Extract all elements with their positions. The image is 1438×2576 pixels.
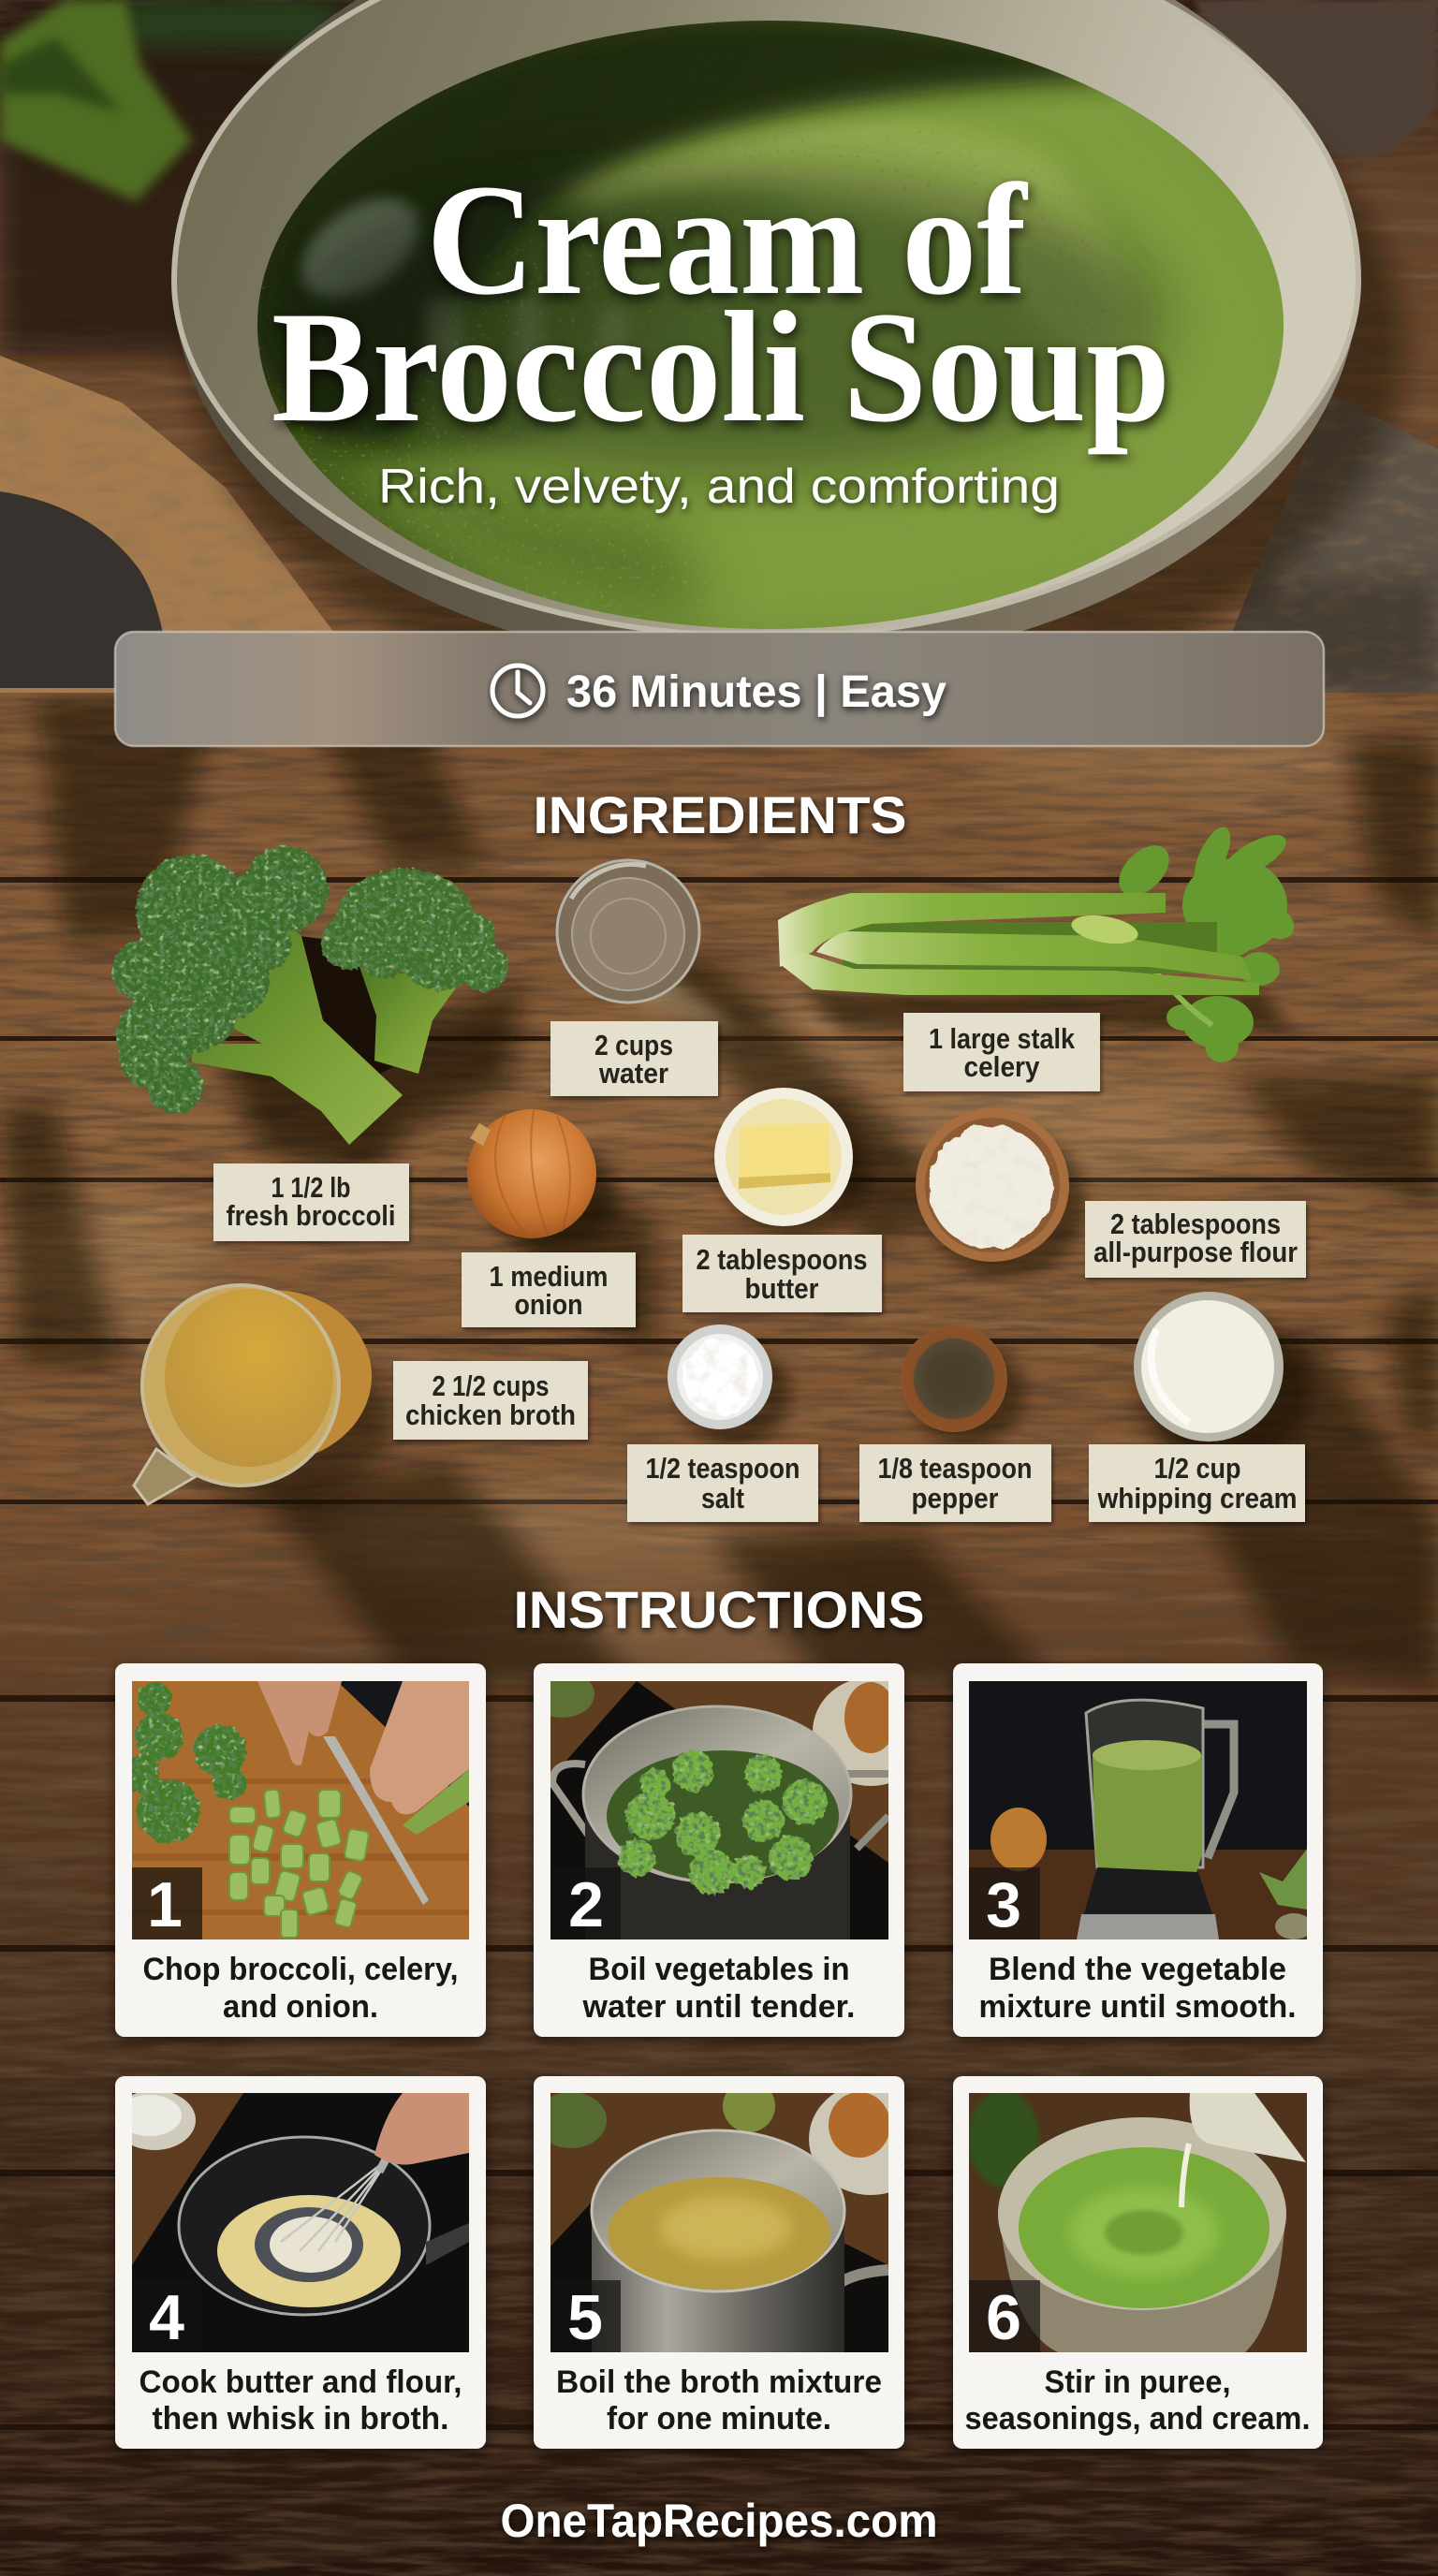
- step card 6: [953, 2076, 1323, 2449]
- central pale swirl: [552, 120, 1132, 374]
- main crown: [112, 846, 329, 1114]
- step card 4: [113, 2076, 486, 2449]
- celery stalk: [403, 1769, 469, 1835]
- label: pepper: 1/8 teaspoon: [878, 1452, 1032, 1485]
- bottom stalk: [780, 952, 1259, 995]
- caption 4: [139, 2364, 462, 2437]
- herbs: [968, 2090, 1039, 2188]
- caption 4: then whisk in broth.: [152, 2401, 449, 2437]
- number badge 2: 2: [568, 1869, 604, 1940]
- photo: boiling broth: [536, 2080, 932, 2352]
- photo: boiling vegetables: [529, 1671, 929, 1939]
- photo: finished soup with cream: [968, 2090, 1307, 2352]
- roux: [217, 2195, 401, 2307]
- celery leaves: [1109, 822, 1300, 1062]
- label: butter: butter: [745, 1272, 818, 1305]
- label: pepper: [859, 1444, 1051, 1522]
- number badge 3: [969, 1867, 1040, 1940]
- ingredient: flour: [916, 1108, 1086, 1278]
- broth liquid: [165, 1289, 333, 1467]
- label: butter: [682, 1235, 882, 1312]
- photo: chopping vegetables: [122, 1681, 469, 1939]
- photo: making roux: [113, 2090, 469, 2352]
- caption 6: [964, 2364, 1311, 2437]
- label: water: [550, 1021, 718, 1096]
- label: water: water: [598, 1057, 668, 1090]
- caption 5: Boil the broth mixture: [556, 2364, 882, 2400]
- pitcher: [1190, 2093, 1306, 2162]
- pot handles: [552, 1764, 594, 1844]
- caption 6: seasonings, and cream.: [964, 2401, 1311, 2437]
- label: broccoli: [213, 1164, 409, 1241]
- cream stream: [1181, 2144, 1189, 2207]
- step card 3: [953, 1663, 1323, 2037]
- label: water: 2 cups: [594, 1029, 673, 1061]
- caption 2: [581, 1952, 856, 2025]
- icon: clock: [492, 666, 543, 716]
- label: whipping cream: 1/2 cup: [1153, 1452, 1241, 1485]
- broccoli shadow: [215, 983, 524, 1179]
- label: whipping cream: [1089, 1444, 1305, 1522]
- caption 4: Cook butter and flour,: [139, 2364, 462, 2400]
- number badge 6: 6: [986, 2282, 1021, 2353]
- label: chicken broth: chicken broth: [405, 1398, 576, 1431]
- top stalk: [778, 893, 1166, 967]
- heading: instructions: INSTRUCTIONS: [513, 1580, 925, 1639]
- caption 2: Boil vegetables in: [588, 1952, 850, 1987]
- label: celery: celery: [964, 1050, 1040, 1083]
- step card 5: [534, 2076, 932, 2449]
- dark metal spoon: [0, 491, 170, 688]
- foam highlight: [285, 178, 436, 318]
- label: celery: [903, 1013, 1100, 1091]
- ingredient: onion: [467, 1109, 618, 1250]
- ingredient: celery: [778, 822, 1300, 1062]
- caption 2: water until tender.: [581, 1989, 856, 2025]
- caption 5: for one minute.: [607, 2401, 831, 2437]
- top-left blurred background: dark wood and broccoli stem: [0, 0, 487, 356]
- ingredient: pepper: [901, 1325, 1025, 1446]
- broccoli florets: [122, 1682, 246, 1843]
- number badge 2: [550, 1867, 621, 1940]
- green liquid: [1093, 1743, 1202, 1884]
- label: flour: [1085, 1201, 1306, 1278]
- amber side of cup: [171, 1290, 372, 1462]
- title: [271, 152, 1170, 455]
- photo: blender: [969, 1681, 1313, 1939]
- blender jar: [1086, 1700, 1203, 1867]
- whisk: [281, 2159, 389, 2251]
- knife: [323, 1736, 429, 1905]
- water: [607, 1750, 839, 1881]
- number badge 1: 1: [147, 1869, 183, 1940]
- time and difficulty bar: [115, 632, 1324, 746]
- broth surface: [608, 2177, 830, 2290]
- caption 1: Chop broccoli, celery,: [142, 1952, 459, 1987]
- scrim behind title: [281, 164, 1161, 473]
- hands: [257, 1681, 342, 1765]
- greens right: [1259, 1849, 1307, 1910]
- blender handle: [1203, 1724, 1234, 1858]
- title: Broccoli Soup: [271, 279, 1170, 455]
- label: butter: 2 tablespoons: [697, 1243, 867, 1276]
- lit burlap surface, lower left: [0, 346, 346, 693]
- soup surface: [243, 0, 1301, 637]
- step card 1: [115, 1663, 486, 2037]
- caption 6: Stir in puree,: [1045, 2364, 1230, 2400]
- heading: ingredients: INGREDIENTS: [534, 785, 906, 844]
- pot body: [585, 1797, 850, 1939]
- chopped celery pieces: [229, 1789, 370, 1938]
- dark top shadow crescent: [253, 9, 1133, 440]
- caption 3: Blend the vegetable: [989, 1952, 1286, 1987]
- pan: [179, 2137, 430, 2315]
- label: flour: all-purpose flour: [1093, 1236, 1298, 1268]
- label: chicken broth: 2 1/2 cups: [433, 1369, 549, 1402]
- glass handle: [134, 1449, 195, 1504]
- label: onion: 1 medium: [489, 1260, 609, 1293]
- ingredient: chicken broth in glass cup: [134, 1285, 393, 1507]
- label: flour: 2 tablespoons: [1110, 1208, 1281, 1240]
- label: chicken broth: [393, 1361, 588, 1440]
- ingredient: butter: [714, 1088, 869, 1239]
- caption 5: [556, 2364, 882, 2437]
- label: whipping cream: whipping cream: [1097, 1482, 1298, 1515]
- onion: [990, 1808, 1047, 1871]
- label: broccoli: 1 1/2 lb: [271, 1171, 350, 1204]
- label: salt: 1/2 teaspoon: [646, 1452, 800, 1485]
- smaller crown: [321, 869, 508, 991]
- label: celery: 1 large stalk: [929, 1022, 1076, 1055]
- side bowl and onion: [813, 1677, 929, 1786]
- blender base: [1081, 1867, 1215, 1924]
- time text: 36 Minutes | Easy: [566, 667, 946, 717]
- green soup: [1019, 2147, 1269, 2308]
- label: salt: [627, 1444, 818, 1522]
- lit soup area: [356, 79, 1288, 627]
- specks of herbs: [243, 0, 1301, 637]
- celery inner shadow: [843, 922, 1217, 973]
- number badge 5: 5: [567, 2282, 603, 2353]
- footer website: OneTapRecipes.com: [500, 2495, 938, 2547]
- main broccoli stem: [192, 917, 403, 1145]
- label: pepper: pepper: [912, 1482, 998, 1515]
- smaller broccoli stem: [359, 964, 462, 1074]
- caption 1: [142, 1952, 459, 2025]
- pot interior: [592, 2130, 844, 2291]
- title: Cream of: [427, 152, 1029, 328]
- broccoli in water: [618, 1750, 828, 1895]
- label: onion: onion: [515, 1288, 582, 1321]
- hand: [374, 2093, 469, 2165]
- bowl exterior: [173, 0, 1358, 669]
- glass rim: [142, 1285, 339, 1486]
- label: onion: [462, 1252, 636, 1327]
- number badge 4: [132, 2280, 202, 2353]
- number badge 6: [969, 2280, 1040, 2353]
- caption 1: and onion.: [223, 1989, 378, 2025]
- ingredient: glass of water: [557, 860, 740, 1030]
- ingredient: whipping cream: [1134, 1292, 1311, 1465]
- bowl rim: [998, 2117, 1286, 2310]
- soft highlight streaks: [426, 300, 627, 374]
- pot rim: [583, 1706, 851, 1882]
- pot body: [592, 2214, 844, 2352]
- number badge 1: [132, 1867, 202, 1940]
- yellow inner leaves: [1069, 911, 1140, 948]
- ingredient: broccoli: [112, 846, 524, 1179]
- bowl rim and inner wall: [174, 0, 1358, 637]
- caption 3: [979, 1952, 1296, 2025]
- bowl shadow: [187, 0, 1404, 721]
- side bowl and onion: [809, 2083, 932, 2195]
- middle stalk: [816, 931, 1253, 980]
- ingredient: salt: [668, 1325, 791, 1446]
- caption 3: mixture until smooth.: [979, 1989, 1296, 2025]
- bowl exterior: [1000, 2218, 1285, 2352]
- hero bowl of soup: [171, 0, 1416, 632]
- subtitle: Rich, velvety, and comforting: [378, 460, 1060, 514]
- number badge 3: 3: [986, 1869, 1021, 1940]
- gap shadow between heads: [300, 936, 393, 1086]
- pot handle: [814, 2270, 888, 2331]
- number badge 5: [550, 2280, 621, 2353]
- number badge 4: 4: [149, 2282, 184, 2353]
- label: broccoli: fresh broccoli: [227, 1199, 395, 1232]
- label: salt: salt: [701, 1482, 744, 1515]
- top-right ceramic dish: [1194, 0, 1438, 159]
- lower left dim soup: [290, 429, 719, 626]
- step card 2: [529, 1663, 929, 2037]
- linen napkin, right side: [1232, 395, 1438, 693]
